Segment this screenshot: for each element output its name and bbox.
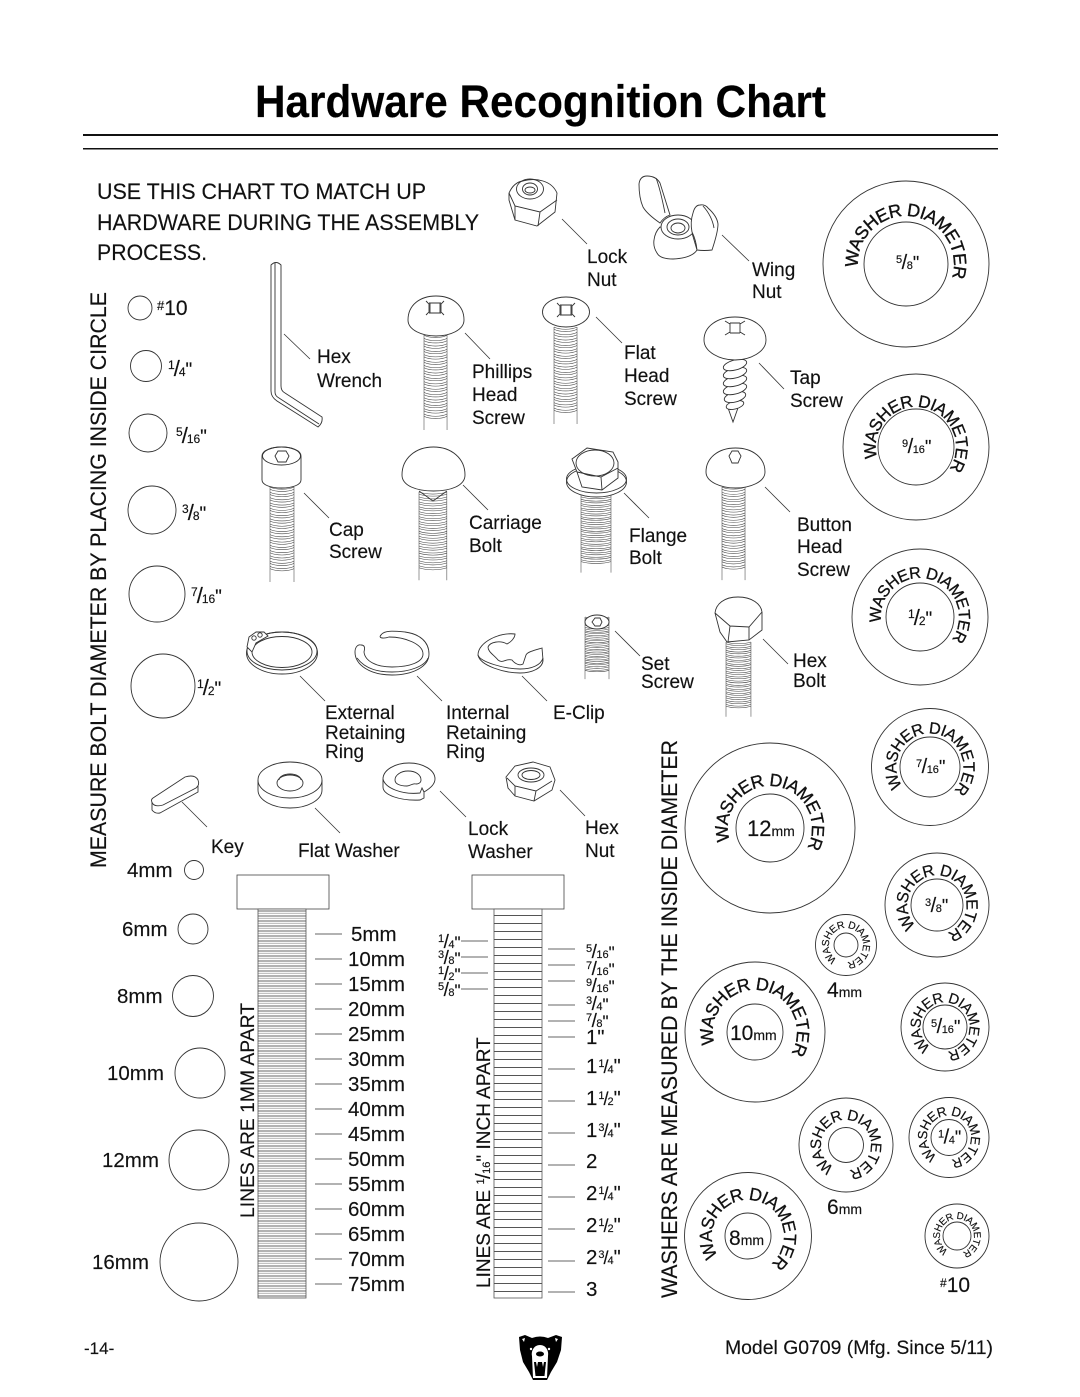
washer: 12 mm: 12mm bbox=[747, 816, 795, 841]
icon: key bbox=[152, 776, 207, 827]
label: button head screw: Screw bbox=[797, 560, 850, 581]
washer: 5/8 inch: 5 bbox=[896, 254, 902, 266]
icon: flat head screw bbox=[542, 297, 622, 424]
washer: 1/2 inch: 1 bbox=[908, 607, 915, 621]
washer: 10 mm bbox=[684, 962, 826, 1102]
washer: 9/16 inch: 16" bbox=[913, 437, 931, 457]
metric bolt diameter circles: 10mm bbox=[107, 1062, 164, 1085]
label: inch line spacing: / bbox=[473, 1173, 495, 1179]
washer: 3/8 inch bbox=[884, 852, 990, 958]
inch bolt diameter circles: 1 bbox=[168, 358, 175, 372]
label: flange bolt: Bolt bbox=[629, 548, 662, 569]
washer: number 10: # bbox=[940, 1276, 947, 1290]
vertical heading: washers: WASHERS ARE MEASURED BY THE INSIDE DIAMETER bbox=[657, 740, 682, 1298]
icon: lock nut bbox=[509, 179, 587, 244]
chart: inch ruler bolt: 1 bbox=[586, 1055, 597, 1078]
chart: inch ruler bolt: / bbox=[592, 942, 598, 963]
washer: 3/8 inch: / bbox=[931, 895, 937, 917]
chart: inch ruler bolt: 4" bbox=[448, 933, 461, 952]
chart: millimetre ruler bolt: 55mm bbox=[348, 1173, 405, 1196]
icon: set screw bbox=[585, 615, 640, 679]
chart: inch ruler bolt: 3 bbox=[586, 995, 592, 1007]
label: flat washer: Flat Washer bbox=[298, 841, 400, 862]
label: cap screw: Cap bbox=[329, 520, 364, 541]
chart: inch ruler bolt: 2 bbox=[586, 1246, 597, 1269]
metric bolt diameter circles: 4mm bbox=[127, 859, 173, 882]
washer: 10 mm: WASHER DIAMETER bbox=[700, 978, 810, 1056]
washer: number 10 bbox=[924, 1204, 990, 1297]
washer: 6 mm: 6mm bbox=[827, 1196, 862, 1219]
label: external retaining ring: External bbox=[325, 703, 395, 724]
washer: 9/16 inch: WASHER DIAMETER bbox=[863, 395, 968, 472]
instructions text block: PROCESS. bbox=[97, 240, 207, 265]
chart: inch ruler bolt: / bbox=[592, 976, 598, 997]
footer: model: Model G0709 (Mfg. Since 5/11) bbox=[725, 1337, 993, 1359]
washer: number 10: WASHER DIAMETER bbox=[933, 1212, 981, 1258]
inch bolt diameter circles: 2" bbox=[208, 679, 221, 700]
instructions text block: HARDWARE DURING THE ASSEMBLY bbox=[97, 210, 479, 235]
washer: 1/4 inch: WASHER DIAMETER bbox=[918, 1106, 980, 1168]
inch bolt diameter circles: / bbox=[188, 500, 195, 525]
label: inch line spacing: 1 bbox=[475, 1178, 487, 1184]
inch bolt diameter circles: 3 bbox=[182, 502, 189, 516]
chart: inch ruler bolt: 8" bbox=[448, 949, 461, 968]
vertical heading: bolt diameter: MEASURE BOLT DIAMETER BY PLACING INSIDE CIRCLE bbox=[86, 292, 111, 868]
washer: 5/16 inch bbox=[900, 982, 990, 1072]
chart: millimetre ruler bolt: 65mm bbox=[348, 1223, 405, 1246]
chart: millimetre ruler bolt: 75mm bbox=[348, 1273, 405, 1296]
washer: 5/8 inch: 8" bbox=[907, 253, 919, 273]
icon: flat washer bbox=[258, 762, 340, 833]
washer: 1/2 inch: WASHER DIAMETER bbox=[869, 567, 970, 643]
chart: millimetre ruler bolt: 50mm bbox=[348, 1148, 405, 1171]
washer: 7/16 inch: 16" bbox=[927, 757, 945, 777]
washer: 7/16 inch: / bbox=[922, 756, 928, 778]
chart: inch ruler bolt: / bbox=[444, 964, 450, 985]
label: hex wrench: Wrench bbox=[317, 371, 382, 392]
chart: inch ruler bolt: / bbox=[592, 994, 598, 1015]
chart: inch ruler bolt: 2" bbox=[608, 1088, 621, 1110]
icon: cap screw bbox=[262, 447, 329, 582]
inch bolt diameter circles: 8" bbox=[193, 504, 206, 525]
icon: bear logo bbox=[519, 1335, 562, 1380]
chart: inch ruler bolt: / bbox=[604, 1057, 609, 1077]
chart: inch ruler bolt: 1 bbox=[598, 1217, 605, 1229]
chart: inch ruler bolt: / bbox=[604, 1184, 609, 1204]
instructions text block bbox=[97, 179, 479, 265]
washer: 7/16 inch: WASHER DIAMETER bbox=[885, 722, 975, 796]
chart: inch ruler bolt: 5 bbox=[586, 943, 592, 955]
label: lock nut: Lock bbox=[587, 247, 627, 268]
washer: 3/8 inch: 8" bbox=[936, 896, 948, 916]
washer: 1/2 inch: 2" bbox=[919, 609, 932, 630]
label: hex bolt: Hex bbox=[793, 651, 827, 672]
icon: tap screw bbox=[704, 317, 784, 422]
washer: 8 mm bbox=[684, 1172, 812, 1300]
chart: inch ruler bolt: 2 bbox=[586, 1182, 597, 1205]
label: phillips head screw: Phillips bbox=[472, 362, 532, 383]
label: button head screw: Button bbox=[797, 515, 852, 536]
washer: 5/16 inch: 5 bbox=[931, 1018, 937, 1030]
chart: inch ruler bolt: 1 bbox=[586, 1087, 597, 1110]
inch bolt diameter circles: / bbox=[182, 423, 189, 448]
icon: carriage bolt bbox=[402, 447, 488, 580]
label: external retaining ring: Ring bbox=[325, 742, 364, 763]
icon: hex wrench bbox=[271, 262, 322, 427]
metric bolt diameter circles bbox=[92, 859, 238, 1301]
chart: inch ruler bolt: 9 bbox=[586, 977, 592, 989]
chart: inch ruler bolt: / bbox=[604, 1121, 609, 1141]
washer: 9/16 inch bbox=[842, 374, 990, 520]
washer: 5/16 inch: / bbox=[937, 1016, 943, 1038]
page number: -14- bbox=[84, 1339, 114, 1358]
label: set screw: Set bbox=[641, 654, 670, 675]
icon: phillips head screw bbox=[408, 296, 490, 430]
label: lock washer: Washer bbox=[468, 842, 533, 863]
chart: inch ruler bolt: 7 bbox=[586, 1012, 592, 1024]
chart: inch ruler bolt: / bbox=[604, 1248, 609, 1268]
metric bolt diameter circles: 6mm bbox=[122, 918, 168, 941]
chart: millimetre ruler bolt: 40mm bbox=[348, 1098, 405, 1121]
chart: inch ruler bolt: 3 bbox=[586, 1278, 597, 1301]
chart: inch ruler bolt: 4" bbox=[608, 1183, 621, 1205]
icon: hex bolt bbox=[715, 597, 788, 717]
icon: e-clip bbox=[478, 634, 547, 701]
inch bolt diameter circles: 1 bbox=[197, 677, 204, 691]
label: flat head screw: Flat bbox=[624, 343, 656, 364]
chart: millimetre ruler bolt: 45mm bbox=[348, 1123, 405, 1146]
washer: 5/8 inch: WASHER DIAMETER bbox=[844, 203, 967, 278]
chart: inch ruler bolt: 2" bbox=[608, 1215, 621, 1237]
washer: 8 mm: WASHER DIAMETER bbox=[700, 1188, 796, 1270]
chart: inch ruler bolt: / bbox=[592, 1011, 598, 1032]
label: inch line spacing: LINES ARE bbox=[474, 1190, 495, 1288]
label: phillips head screw: Screw bbox=[472, 408, 525, 429]
inch bolt diameter circles: / bbox=[197, 583, 204, 608]
washer: 4 mm bbox=[815, 914, 877, 1002]
washer: 5/16 inch: WASHER DIAMETER bbox=[910, 992, 980, 1060]
washer: 3/8 inch: 3 bbox=[925, 897, 931, 909]
chart: inch ruler bolt: 8" bbox=[596, 1012, 609, 1031]
metric bolt diameter circles: 16mm bbox=[92, 1251, 149, 1274]
label: external retaining ring: Retaining bbox=[325, 723, 405, 744]
chart: inch ruler bolt: / bbox=[444, 980, 450, 1001]
washer: 12 mm bbox=[684, 742, 856, 914]
chart: inch ruler bolt: 3 bbox=[598, 1249, 605, 1261]
label: millimetre line spacing: LINES ARE 1MM APART bbox=[238, 1003, 259, 1218]
label: internal retaining ring: Retaining bbox=[446, 723, 526, 744]
instructions text block: USE THIS CHART TO MATCH UP bbox=[97, 179, 426, 204]
washer: 9/16 inch: / bbox=[908, 436, 914, 458]
chart: millimetre ruler bolt: 35mm bbox=[348, 1073, 405, 1096]
chart: inch ruler bolt: 1 bbox=[438, 933, 444, 945]
chart: inch ruler bolt: 8" bbox=[448, 981, 461, 1000]
washer: 12 mm: WASHER DIAMETER bbox=[714, 774, 824, 850]
chart: inch ruler bolt: 1" bbox=[586, 1026, 605, 1049]
label: button head screw: Head bbox=[797, 537, 842, 558]
chart: inch ruler bolt: 4" bbox=[608, 1056, 621, 1078]
title: Hardware Recognition Chart bbox=[255, 76, 826, 127]
chart: inch ruler bolt: 3 bbox=[438, 949, 444, 961]
label: cap screw: Screw bbox=[329, 542, 382, 563]
icon: lock washer bbox=[383, 763, 466, 817]
icon: hex nut bbox=[506, 762, 585, 816]
label: lock nut: Nut bbox=[587, 270, 617, 291]
chart: millimetre ruler bolt: 15mm bbox=[348, 973, 405, 996]
chart: inch ruler bolt: 1 bbox=[586, 1119, 597, 1142]
washer: 1/4 inch: 4" bbox=[949, 1128, 961, 1148]
icon: internal retaining ring bbox=[355, 631, 442, 701]
label: hex nut: Nut bbox=[585, 841, 615, 862]
chart: inch ruler bolt bbox=[438, 875, 621, 1301]
label: e-clip: E-Clip bbox=[553, 703, 605, 724]
label: flange bolt: Flange bbox=[629, 526, 687, 547]
label: carriage bolt: Carriage bbox=[469, 513, 542, 534]
chart: inch ruler bolt: 4" bbox=[608, 1120, 621, 1142]
washer: 1/2 inch bbox=[852, 548, 988, 686]
washer: 1/2 inch: / bbox=[914, 605, 921, 630]
metric bolt diameter circles: 8mm bbox=[117, 985, 163, 1008]
washer: 4 mm: 4mm bbox=[827, 979, 862, 1002]
chart: millimetre ruler bolt: 25mm bbox=[348, 1023, 405, 1046]
inch bolt diameter circles: # bbox=[157, 298, 165, 313]
chart: inch ruler bolt: / bbox=[444, 932, 450, 953]
washer: 1/4 inch: / bbox=[944, 1126, 950, 1148]
washer: 4 mm: WASHER DIAMETER bbox=[822, 921, 870, 968]
label: phillips head screw: Head bbox=[472, 385, 517, 406]
chart: inch ruler bolt: 2 bbox=[586, 1150, 597, 1173]
chart: inch ruler bolt: 1 bbox=[598, 1090, 605, 1102]
chart: inch ruler bolt: 2 bbox=[586, 1214, 597, 1237]
chart: millimetre ruler bolt: 60mm bbox=[348, 1198, 405, 1221]
chart: inch ruler bolt: 7 bbox=[586, 960, 592, 972]
inch bolt diameter circles: 4" bbox=[179, 360, 192, 381]
inch bolt diameter circles: 7 bbox=[191, 585, 198, 599]
washer: 5/8 inch bbox=[822, 180, 990, 348]
label: wing nut: Nut bbox=[752, 282, 782, 303]
label: carriage bolt: Bolt bbox=[469, 536, 502, 557]
chart: inch ruler bolt: 3 bbox=[598, 1122, 605, 1134]
washer: 10 mm: 10mm bbox=[730, 1022, 777, 1045]
inch bolt diameter circles: / bbox=[174, 356, 181, 381]
inch bolt diameter circles: 10 bbox=[164, 297, 188, 320]
label: tap screw: Tap bbox=[790, 368, 821, 389]
chart: millimetre ruler bolt: 70mm bbox=[348, 1248, 405, 1271]
washer: 3/8 inch: WASHER DIAMETER bbox=[896, 864, 978, 941]
icon: external retaining ring bbox=[246, 632, 325, 701]
washer: 9/16 inch: 9 bbox=[902, 438, 908, 450]
label: tap screw: Screw bbox=[790, 391, 843, 412]
label: set screw: Screw bbox=[641, 672, 694, 693]
chart: inch ruler bolt: 16" bbox=[596, 943, 615, 962]
chart: inch ruler bolt: 1 bbox=[598, 1058, 605, 1070]
chart: inch ruler bolt: / bbox=[604, 1089, 609, 1109]
washer: 5/16 inch: 16" bbox=[942, 1017, 960, 1037]
chart: millimetre ruler bolt: 5mm bbox=[351, 923, 397, 946]
washer: number 10: 10 bbox=[947, 1274, 970, 1297]
icon: wing nut bbox=[639, 176, 749, 261]
chart: inch ruler bolt: 4" bbox=[608, 1247, 621, 1269]
chart: inch ruler bolt: 16" bbox=[596, 960, 615, 979]
metric bolt diameter circles: 12mm bbox=[102, 1149, 159, 1172]
chart: millimetre ruler bolt bbox=[237, 875, 405, 1298]
label: hex nut: Hex bbox=[585, 818, 619, 839]
chart: inch ruler bolt: 16" bbox=[596, 977, 615, 996]
label: hex wrench: Hex bbox=[317, 347, 351, 368]
label: key: Key bbox=[211, 837, 244, 858]
label: lock washer: Lock bbox=[468, 819, 508, 840]
inch bolt diameter circles: 5 bbox=[176, 425, 183, 439]
label: inch line spacing: 16" INCH APART bbox=[474, 1037, 495, 1174]
washer: 8 mm: 8mm bbox=[729, 1227, 764, 1250]
chart: inch ruler bolt: / bbox=[444, 948, 450, 969]
chart: inch ruler bolt: 5 bbox=[438, 981, 444, 993]
chart: millimetre ruler bolt: 30mm bbox=[348, 1048, 405, 1071]
washer: 5/8 inch: / bbox=[902, 252, 908, 274]
chart: inch ruler bolt: 1 bbox=[598, 1185, 605, 1197]
label: flat head screw: Screw bbox=[624, 389, 677, 410]
chart: inch ruler bolt: 4" bbox=[596, 995, 609, 1014]
chart: millimetre ruler bolt: 10mm bbox=[348, 948, 405, 971]
label: flat head screw: Head bbox=[624, 366, 669, 387]
icon: flange bolt bbox=[566, 448, 649, 573]
chart: inch ruler bolt: / bbox=[604, 1216, 609, 1236]
label: wing nut: Wing bbox=[752, 260, 795, 281]
chart: millimetre ruler bolt: 20mm bbox=[348, 998, 405, 1021]
chart: inch ruler bolt: 1 bbox=[438, 965, 444, 977]
inch bolt diameter circles: / bbox=[203, 675, 210, 700]
washer: 6 mm bbox=[798, 1098, 894, 1219]
label: internal retaining ring: Internal bbox=[446, 703, 509, 724]
washer: 7/16 inch: 7 bbox=[916, 758, 922, 770]
label: hex bolt: Bolt bbox=[793, 671, 826, 692]
icon: button head screw bbox=[706, 448, 790, 580]
inch bolt diameter circles: 16" bbox=[202, 587, 222, 608]
chart: inch ruler bolt: 2" bbox=[448, 965, 461, 984]
label: internal retaining ring: Ring bbox=[446, 742, 485, 763]
washer: 7/16 inch bbox=[871, 708, 989, 826]
chart: inch ruler bolt: / bbox=[592, 959, 598, 980]
washer: 6 mm: WASHER DIAMETER bbox=[810, 1110, 882, 1180]
inch bolt diameter circles: 16" bbox=[187, 427, 207, 448]
inch bolt diameter circles bbox=[128, 296, 222, 718]
washer: 1/4 inch: 1 bbox=[938, 1128, 944, 1140]
